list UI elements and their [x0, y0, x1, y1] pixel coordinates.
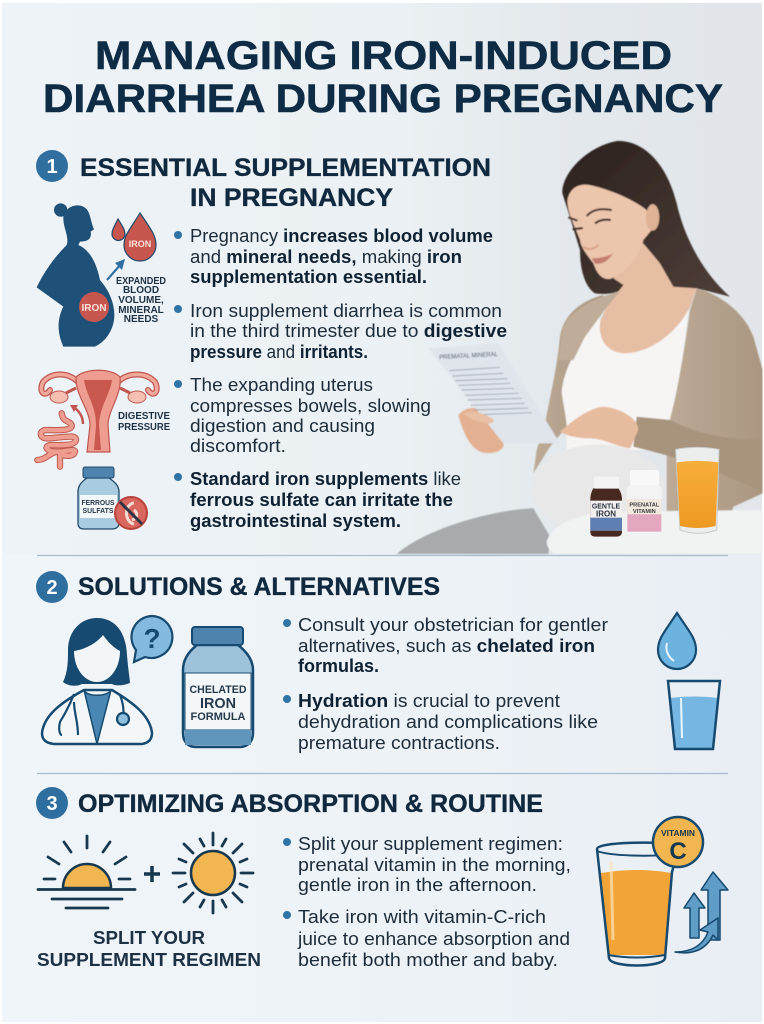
icon: sunrise [38, 836, 135, 908]
label: VOLUME, [118, 295, 164, 306]
text block: bullet 4 [174, 469, 461, 531]
icon: uterus and bowels with digestive pressure [37, 370, 170, 467]
photo part: lower cardigan right [667, 288, 763, 512]
text block: bullet 1: supplementation essential. [190, 267, 427, 287]
panel: section 2 solutions and alternatives [36, 571, 720, 753]
icon: absorption arrows [675, 872, 728, 953]
icon: water drop [658, 613, 696, 669]
text block: consult: Consult your obstetrician for gentler [298, 615, 608, 635]
photo part: gentle iron bottle: GENTLE [592, 504, 621, 511]
text block: split regimen: prenatal vitamin in the morning, [298, 855, 571, 875]
photo part: sleeve forearm [633, 417, 763, 492]
icon: ferrous sulfate bottle with prohibition sign [78, 467, 147, 529]
text block: bullet 2 [174, 301, 507, 362]
text block: bullet 3: digestion and causing [190, 416, 375, 436]
head group [558, 141, 730, 360]
photo part: left hand [458, 408, 505, 453]
photo: pregnant woman reading a prenatal mineral label [397, 141, 763, 554]
photo: pregnant woman reading a prenatal mineral label: PREMATAL MINERAL [439, 351, 498, 361]
icon: chelated iron formula bottle [183, 627, 253, 747]
heading: section 1: ESSENTIAL SUPPLEMENTATION [80, 154, 491, 182]
iron circle [79, 292, 109, 322]
label: EXPANDED [116, 276, 166, 287]
text block: hydration: dehydration and complications like [298, 712, 598, 732]
title [43, 34, 723, 121]
photo part: grey leggings [397, 508, 550, 554]
photo part: neck and chest [600, 243, 697, 353]
heading: section 1: 1 [46, 156, 58, 178]
photo part: gentle iron bottle: IRON [596, 510, 616, 519]
icon: ferrous sulfate bottle with prohibition sign: FERROUS [82, 498, 114, 507]
photo part: prenatal mineral sheet [428, 343, 560, 443]
title: MANAGING IRON-INDUCED [95, 34, 672, 78]
arrow [73, 407, 83, 424]
photo part: prenatal vitamin bottle: VITAMIN [633, 509, 656, 515]
text block: consult: formulas. [298, 656, 379, 676]
label: split your supplement regimen: SPLIT YOUR [93, 927, 205, 948]
photo part: table [547, 510, 763, 554]
text block: bullet 3: discomfort. [190, 436, 286, 456]
icon: doctor with stethoscope [42, 616, 172, 744]
large iron drop [124, 213, 156, 261]
label [118, 410, 170, 433]
label: NEEDS [124, 314, 159, 325]
text block: bullet 4: gastrointestinal system. [190, 511, 401, 531]
icon: glass of orange juice with vitamin c [597, 817, 703, 966]
photo part: face [567, 185, 652, 279]
text block: consult [283, 615, 608, 676]
vitamin c badge [653, 817, 703, 867]
text block: bullet 2: pressure and irritants. [190, 342, 368, 362]
text block: consult: alternatives, such as chelated iron [298, 636, 595, 656]
label: MINERAL [118, 305, 164, 316]
label: split your supplement regimen: SUPPLEMENT REGIMEN [37, 949, 261, 970]
icon: full sun [173, 833, 253, 913]
label: PRESSURE [118, 421, 170, 433]
heading: section 3: 3 [46, 793, 58, 815]
text block: vitamin c juice [283, 907, 570, 970]
vitamin c badge: VITAMIN [661, 829, 695, 838]
photo part: facial features [568, 209, 612, 221]
text block: hydration [283, 691, 598, 753]
photo part: lower cardigan left [533, 295, 603, 473]
vitamin c badge: C [669, 838, 687, 865]
label: BLOOD [123, 285, 159, 296]
text block: vitamin c juice: juice to enhance absorption and [297, 929, 570, 949]
icon: chelated iron formula bottle: FORMULA [190, 711, 246, 723]
large iron drop: IRON [129, 239, 151, 249]
heading: section 1 [36, 150, 491, 212]
text block: bullet 3: compresses bowels, slowing [190, 396, 431, 416]
text block: vitamin c juice: benefit both mother and baby. [298, 950, 558, 970]
heading: section 2: SOLUTIONS & ALTERNATIVES [78, 573, 440, 601]
iron circle: IRON [82, 303, 106, 314]
bowels [37, 413, 76, 467]
speech bubble with question mark: ? [143, 623, 161, 654]
text block: bullet 1: and mineral needs, making iron [190, 247, 462, 267]
label: split your supplement regimen [37, 927, 261, 970]
photo part: prenatal vitamin bottle [627, 470, 662, 537]
icon: chelated iron formula bottle: CHELATED [190, 684, 247, 696]
photo part: right hand [560, 407, 638, 448]
text block: bullet 2: in the third trimester due to digestive [190, 321, 507, 341]
text block: bullet 1 [174, 226, 493, 287]
icon: ferrous sulfate bottle with prohibition sign: SULFATS [82, 506, 114, 515]
text block: split regimen [283, 834, 571, 895]
icon: plus [144, 866, 160, 882]
icon: glass of water [668, 681, 720, 749]
text block: split regimen: Split your supplement regimen: [298, 834, 563, 854]
text block: hydration: premature contractions. [298, 733, 500, 753]
text block: bullet 3: The expanding uterus [190, 375, 373, 395]
icon: pregnant silhouette with iron drops [37, 203, 166, 347]
heading: section 2: 2 [46, 577, 58, 599]
text block: vitamin c juice: Take iron with vitamin-C-rich [298, 907, 546, 927]
label: DIGESTIVE [118, 410, 170, 422]
icon: chelated iron formula bottle: IRON [200, 695, 236, 712]
photo part: glass of orange juice [676, 447, 719, 533]
panel: section 1 essential supplementation [36, 150, 507, 531]
text block: bullet 3 [174, 375, 431, 456]
photo part: upper cardigan left [558, 292, 618, 360]
text block: bullet 4: ferrous sulfate can irritate the [190, 490, 453, 510]
photo part: gentle iron bottle [590, 477, 622, 537]
panel: section 3 optimizing absorption and routine [36, 787, 728, 970]
arrow [107, 259, 125, 280]
photo part: hair [562, 141, 730, 297]
small drop [112, 219, 125, 240]
label [116, 276, 166, 325]
heading: section 1: IN PREGNANCY [190, 184, 393, 212]
text block: hydration: Hydration is crucial to prevent [298, 691, 560, 711]
heading: section 3: OPTIMIZING ABSORPTION & ROUTINE [78, 790, 543, 818]
photo part: thumb [464, 412, 494, 423]
photo part: belly [533, 444, 664, 534]
text block: bullet 2: Iron supplement diarrhea is common [190, 301, 502, 321]
photo part: prenatal vitamin bottle: PRENATAL [629, 503, 660, 509]
text block: bullet 4: Standard iron supplements like [190, 469, 461, 489]
text block: split regimen: gentle iron in the afternoon. [298, 875, 537, 895]
title: DIARRHEA DURING PREGNANCY [43, 77, 723, 121]
photo part: white top [562, 310, 688, 450]
text block: bullet 1: Pregnancy increases blood volume [190, 226, 493, 246]
